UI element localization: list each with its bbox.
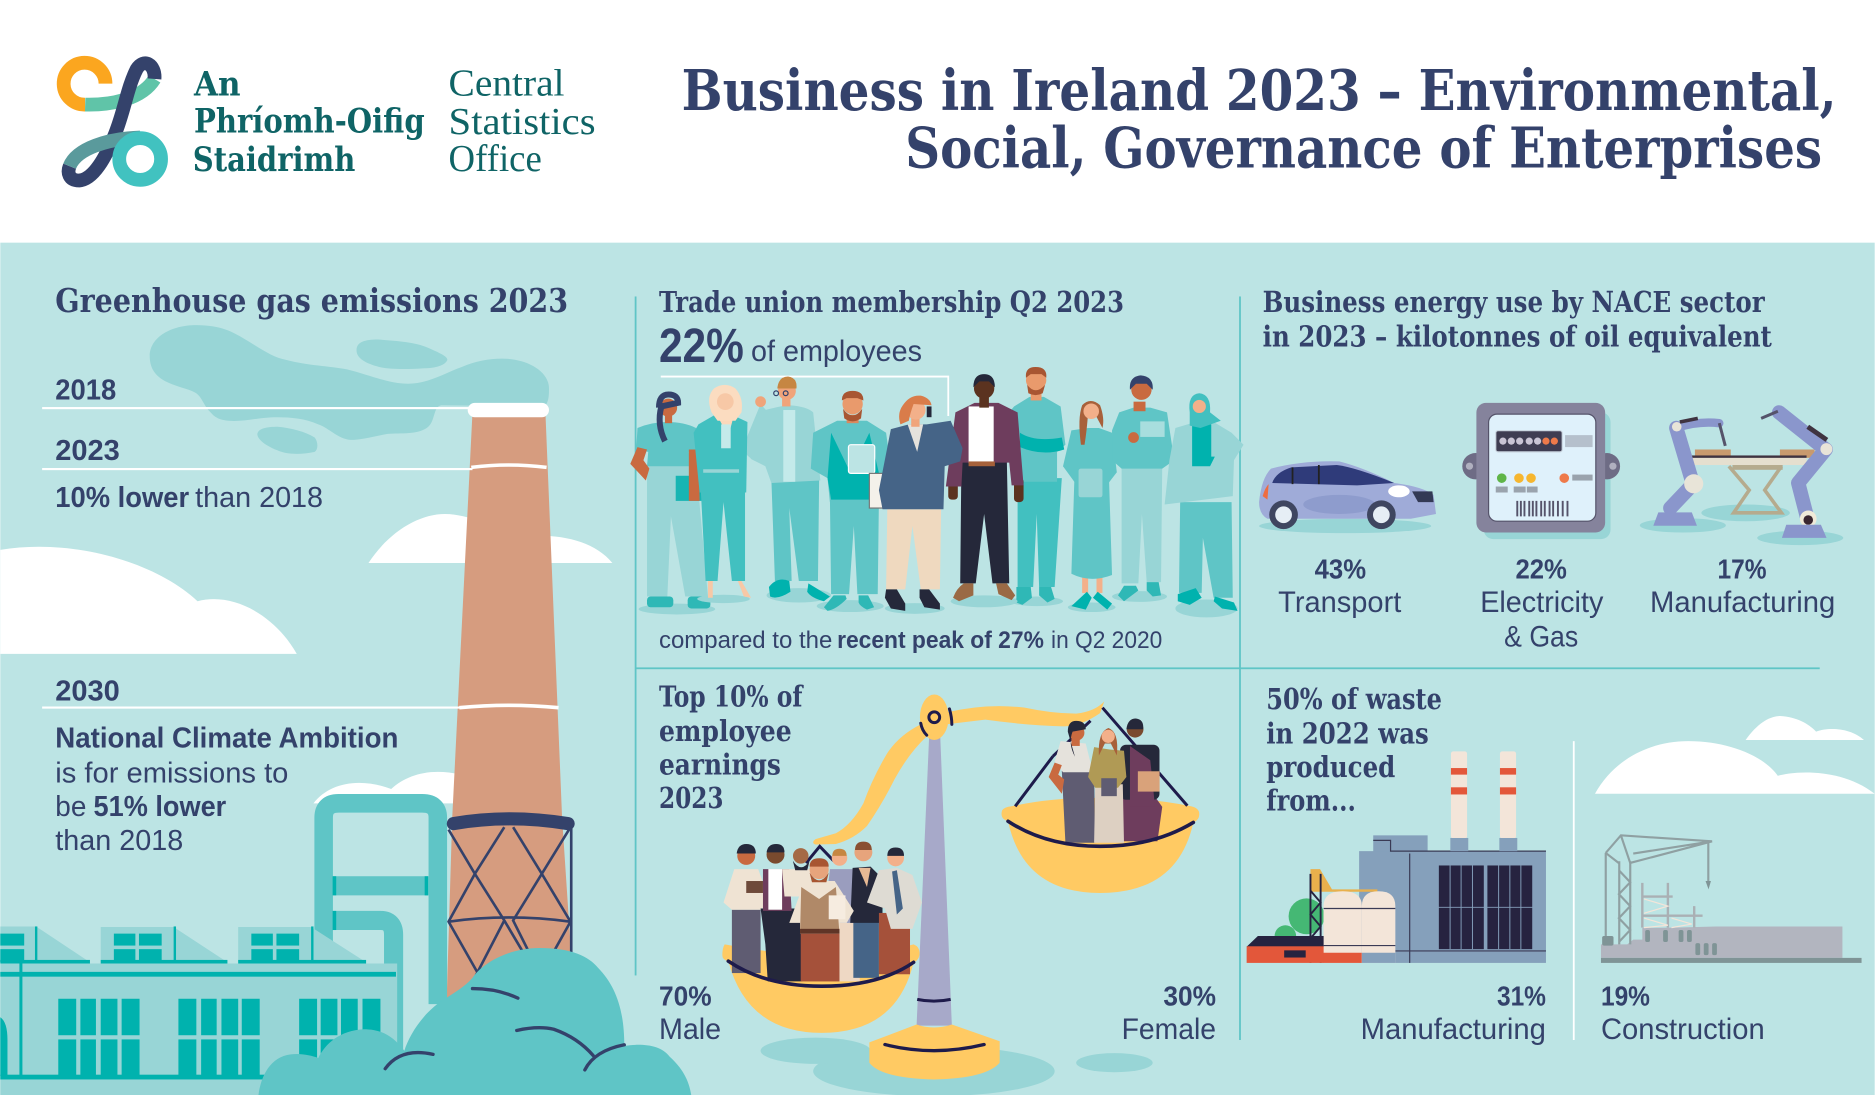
stat: manufacturing energy bbox=[1650, 554, 1835, 619]
stat: electricity and gas: 22% bbox=[1515, 554, 1567, 585]
women group bbox=[1049, 718, 1162, 843]
balance scale bbox=[813, 695, 1104, 1079]
stat: 31% manufacturing: 31% bbox=[1497, 980, 1546, 1011]
marker: 2023: 2023 bbox=[55, 435, 120, 467]
marker: 2030: is for emissions to bbox=[55, 757, 288, 789]
note: recent peak: in Q2 2020 bbox=[1051, 627, 1162, 654]
heading: top 10%: employee bbox=[659, 714, 792, 748]
heading: energy bbox=[1263, 285, 1772, 354]
marker: 2023: 10% lower bbox=[55, 482, 189, 514]
marker: 2030: National Climate Ambition bbox=[55, 723, 398, 755]
stat: 30% female: Female bbox=[1122, 1013, 1216, 1046]
person 2 bbox=[694, 385, 751, 603]
person 4 bbox=[811, 391, 891, 612]
stat: manufacturing energy: Manufacturing bbox=[1650, 586, 1835, 619]
marker: 2023 bbox=[42, 435, 472, 514]
callout bracket bbox=[661, 377, 948, 416]
shadows under scale bbox=[761, 1038, 1153, 1095]
right pan with women bbox=[1002, 708, 1199, 893]
marker: 2030: than 2018 bbox=[55, 825, 183, 857]
marker: 2030 bbox=[42, 676, 461, 857]
icon: CSO logo bbox=[64, 63, 161, 181]
marker: 2018: 2018 bbox=[55, 374, 116, 406]
person 5 bbox=[869, 396, 963, 614]
clouds bbox=[0, 514, 612, 803]
logo wordmark Irish: Phríomh-Oifig bbox=[194, 102, 425, 141]
factory building bbox=[0, 926, 397, 1095]
stat: 22% of employees bbox=[659, 320, 922, 373]
marker: 2030: be bbox=[55, 791, 86, 823]
person 3 bbox=[744, 377, 831, 602]
stat: 30% female bbox=[1122, 980, 1216, 1046]
stat: 30% female: 30% bbox=[1163, 980, 1216, 1011]
note: recent peak bbox=[659, 627, 1162, 654]
icon: power plant bbox=[1247, 751, 1546, 963]
heading: top 10%: earnings bbox=[659, 748, 781, 782]
divider: white bbox=[1573, 741, 1575, 1040]
icon: car bbox=[1259, 461, 1436, 533]
stat: electricity and gas: Electricity bbox=[1480, 586, 1603, 619]
title bbox=[682, 58, 1836, 181]
clouds right bbox=[1595, 716, 1875, 794]
stat: 22% of employees: of employees bbox=[751, 335, 922, 368]
person 1 bbox=[630, 394, 715, 614]
person 6 bbox=[946, 374, 1024, 607]
person 7 bbox=[1009, 367, 1065, 606]
logo wordmark English: Central bbox=[449, 63, 565, 105]
person 9 bbox=[1112, 375, 1174, 602]
people illustration bbox=[630, 367, 1244, 617]
stat: 70% male: Male bbox=[659, 1013, 721, 1046]
heading: 50% of waste: 50% of waste bbox=[1266, 682, 1442, 716]
person 8 bbox=[1063, 401, 1117, 612]
icon: robot arms bbox=[1640, 411, 1843, 545]
logo wordmark Irish: Staidrimh bbox=[193, 140, 355, 179]
person 10 bbox=[1165, 393, 1244, 617]
heading: energy: Business energy use by NACE sector bbox=[1263, 285, 1765, 319]
note: recent peak: recent peak of 27% bbox=[837, 627, 1044, 654]
heading: 50% of waste: in 2022 was bbox=[1266, 717, 1429, 751]
men group bbox=[724, 842, 922, 981]
icon: construction site bbox=[1601, 835, 1862, 963]
logo wordmark English: Office bbox=[449, 138, 542, 180]
marker: 2030: 51% lower bbox=[94, 791, 226, 823]
stat: 31% manufacturing bbox=[1361, 980, 1546, 1046]
logo wordmark Irish: An bbox=[193, 65, 241, 104]
logo wordmark English: Statistics bbox=[449, 101, 596, 143]
stat: 70% male bbox=[659, 980, 721, 1046]
stat: 22% of employees: 22% bbox=[659, 320, 744, 373]
heading: energy: in 2023 – kilotonnes of oil equivalent bbox=[1263, 320, 1772, 354]
stat: transport: 43% bbox=[1315, 554, 1366, 585]
marker: 2023: than 2018 bbox=[195, 482, 323, 514]
smoke plume bbox=[150, 325, 549, 454]
header bbox=[64, 58, 1836, 181]
heading: top 10%: Top 10% of bbox=[659, 679, 804, 713]
heading: 50% of waste bbox=[1266, 682, 1442, 817]
panel: greenhouse gas emissions bbox=[0, 282, 691, 1095]
logo wordmark Irish bbox=[193, 65, 425, 179]
stat: 70% male: 70% bbox=[659, 980, 712, 1011]
heading: top 10%: 2023 bbox=[659, 781, 724, 815]
logo wordmark English bbox=[449, 63, 596, 180]
heading: 50% of waste: produced bbox=[1266, 750, 1395, 784]
heading: top 10% bbox=[659, 679, 804, 815]
bush bbox=[259, 948, 691, 1095]
marker: 2030: 2030 bbox=[55, 676, 120, 708]
stat: transport bbox=[1278, 554, 1402, 619]
panel: business energy use bbox=[1259, 285, 1843, 654]
pipes bbox=[324, 803, 438, 1058]
left pan with men bbox=[722, 842, 922, 1033]
stat: 31% manufacturing: Manufacturing bbox=[1361, 1013, 1546, 1046]
heading: 50% of waste: from... bbox=[1266, 783, 1356, 817]
dividers bbox=[635, 296, 1820, 1040]
stat: electricity and gas: & Gas bbox=[1504, 621, 1578, 654]
heading: trade union: Trade union membership Q2 2023 bbox=[659, 285, 1124, 319]
heading: greenhouse gas: Greenhouse gas emissions 2023 bbox=[55, 282, 568, 320]
stat: 19% construction: Construction bbox=[1601, 1013, 1765, 1046]
icon: energy meter bbox=[1462, 403, 1620, 539]
stat: electricity and gas bbox=[1480, 554, 1603, 654]
panel: trade union membership bbox=[630, 285, 1244, 654]
stat: 19% construction bbox=[1601, 980, 1765, 1046]
chimney scaffold bbox=[449, 819, 571, 998]
stat: 19% construction: 19% bbox=[1601, 980, 1650, 1011]
panel: top 10% earnings bbox=[659, 679, 1216, 1095]
panel: waste bbox=[1247, 682, 1875, 1046]
teal background panel bbox=[0, 243, 1875, 1095]
note: recent peak: compared to the bbox=[659, 627, 832, 654]
stat: transport: Transport bbox=[1278, 586, 1402, 619]
stat: manufacturing energy: 17% bbox=[1718, 554, 1767, 585]
chimney bbox=[446, 403, 575, 1016]
